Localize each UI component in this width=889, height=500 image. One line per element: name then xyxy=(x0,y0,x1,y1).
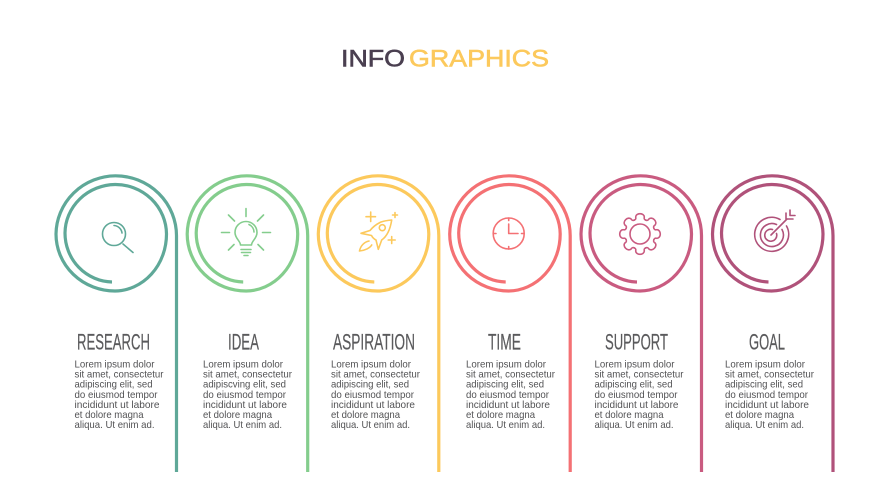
text block: research: do eiusmod tempor xyxy=(74,390,158,401)
text block: idea xyxy=(203,360,292,431)
icon: gear xyxy=(620,214,660,254)
spiral line: time xyxy=(450,176,570,472)
text block: research: adipiscing elit, sed xyxy=(74,380,153,391)
text block: support: do eiusmod tempor xyxy=(594,390,678,401)
text block: goal: sit amet, consectetur xyxy=(725,370,814,381)
text block: aspiration: sit amet, consectetur xyxy=(331,370,420,381)
text block: research: Lorem ipsum dolor xyxy=(74,360,155,370)
text block: research: incididunt ut labore xyxy=(74,400,160,411)
text block: aspiration: adipiscing elit, sed xyxy=(331,380,409,391)
panel: idea xyxy=(187,176,308,472)
spiral line: research xyxy=(56,176,177,472)
heading: time: TIME xyxy=(488,330,521,354)
text block: time: Lorem ipsum dolor xyxy=(466,360,546,370)
text block: aspiration: do eiusmod tempor xyxy=(331,390,414,401)
text block: support: adipiscing elit, sed xyxy=(594,380,673,391)
text block: idea: do eiusmod tempor xyxy=(203,390,286,401)
icon: target xyxy=(755,210,795,251)
spiral line: idea xyxy=(187,176,308,472)
text block: time: et dolore magna xyxy=(466,410,535,421)
panel: aspiration xyxy=(318,176,439,472)
heading: goal: GOAL xyxy=(749,330,785,354)
text block: time: incididunt ut labore xyxy=(466,400,550,411)
text block: support: sit amet, consectetur xyxy=(594,370,684,381)
text block: goal: Lorem ipsum dolor xyxy=(725,360,805,370)
text block: idea: incididunt ut labore xyxy=(203,400,287,411)
spiral line: support xyxy=(581,176,702,472)
text block: support: incididunt ut labore xyxy=(594,400,679,411)
icon: clock xyxy=(493,218,524,249)
heading: aspiration: ASPIRATION xyxy=(333,330,415,354)
text block: idea: et dolore magna xyxy=(203,410,272,421)
text block: aspiration: aliqua. Ut enim ad. xyxy=(331,420,410,431)
text block: time: adipiscing elit, sed xyxy=(466,380,544,391)
text block: aspiration: Lorem ipsum dolor xyxy=(331,360,411,370)
text block: aspiration: incididunt ut labore xyxy=(331,400,415,411)
title: GRAPHICS xyxy=(409,46,549,73)
text block: goal xyxy=(725,360,814,431)
heading: idea: IDEA xyxy=(228,330,259,354)
text block: idea: adipiscving elit, sed xyxy=(203,380,286,391)
title xyxy=(341,46,549,73)
text block: goal: et dolore magna xyxy=(725,410,794,421)
text block: goal: incididunt ut labore xyxy=(725,400,809,411)
text block: time xyxy=(466,360,555,431)
text block: goal: do eiusmod tempor xyxy=(725,390,808,401)
icon: magnifier xyxy=(102,222,133,252)
panel: time xyxy=(450,176,570,472)
text block: time: sit amet, consectetur xyxy=(466,370,555,381)
text block: time: aliqua. Ut enim ad. xyxy=(466,420,545,431)
text block: support: et dolore magna xyxy=(594,410,664,421)
text block: support: aliqua. Ut enim ad. xyxy=(594,420,674,431)
text block: research: sit amet, consectetur xyxy=(74,370,164,381)
text block: research: aliqua. Ut enim ad. xyxy=(74,420,154,431)
heading: research: RESEARCH xyxy=(77,330,150,354)
text block: aspiration xyxy=(331,360,420,431)
text block: aspiration: et dolore magna xyxy=(331,410,400,421)
text block: idea: sit amet, consectetur xyxy=(203,370,292,381)
text block: idea: Lorem ipsum dolor xyxy=(203,360,283,370)
title: INFO xyxy=(341,46,405,73)
text block: research xyxy=(74,360,164,431)
text block: support xyxy=(594,360,684,431)
text block: idea: aliqua. Ut enim ad. xyxy=(203,420,282,431)
text block: goal: adipiscing elit, sed xyxy=(725,380,803,391)
icon: light bulb xyxy=(222,208,270,256)
heading: support: SUPPORT xyxy=(605,330,668,354)
panel: support xyxy=(581,176,702,472)
spiral line: aspiration xyxy=(318,176,439,472)
text block: time: do eiusmod tempor xyxy=(466,390,549,401)
panel: research xyxy=(56,176,177,472)
text block: research: et dolore magna xyxy=(74,410,144,421)
text block: goal: aliqua. Ut enim ad. xyxy=(725,420,804,431)
panel: goal xyxy=(712,176,833,472)
icon: rocket xyxy=(360,212,398,251)
text block: support: Lorem ipsum dolor xyxy=(594,360,675,370)
spiral line: goal xyxy=(712,176,833,472)
